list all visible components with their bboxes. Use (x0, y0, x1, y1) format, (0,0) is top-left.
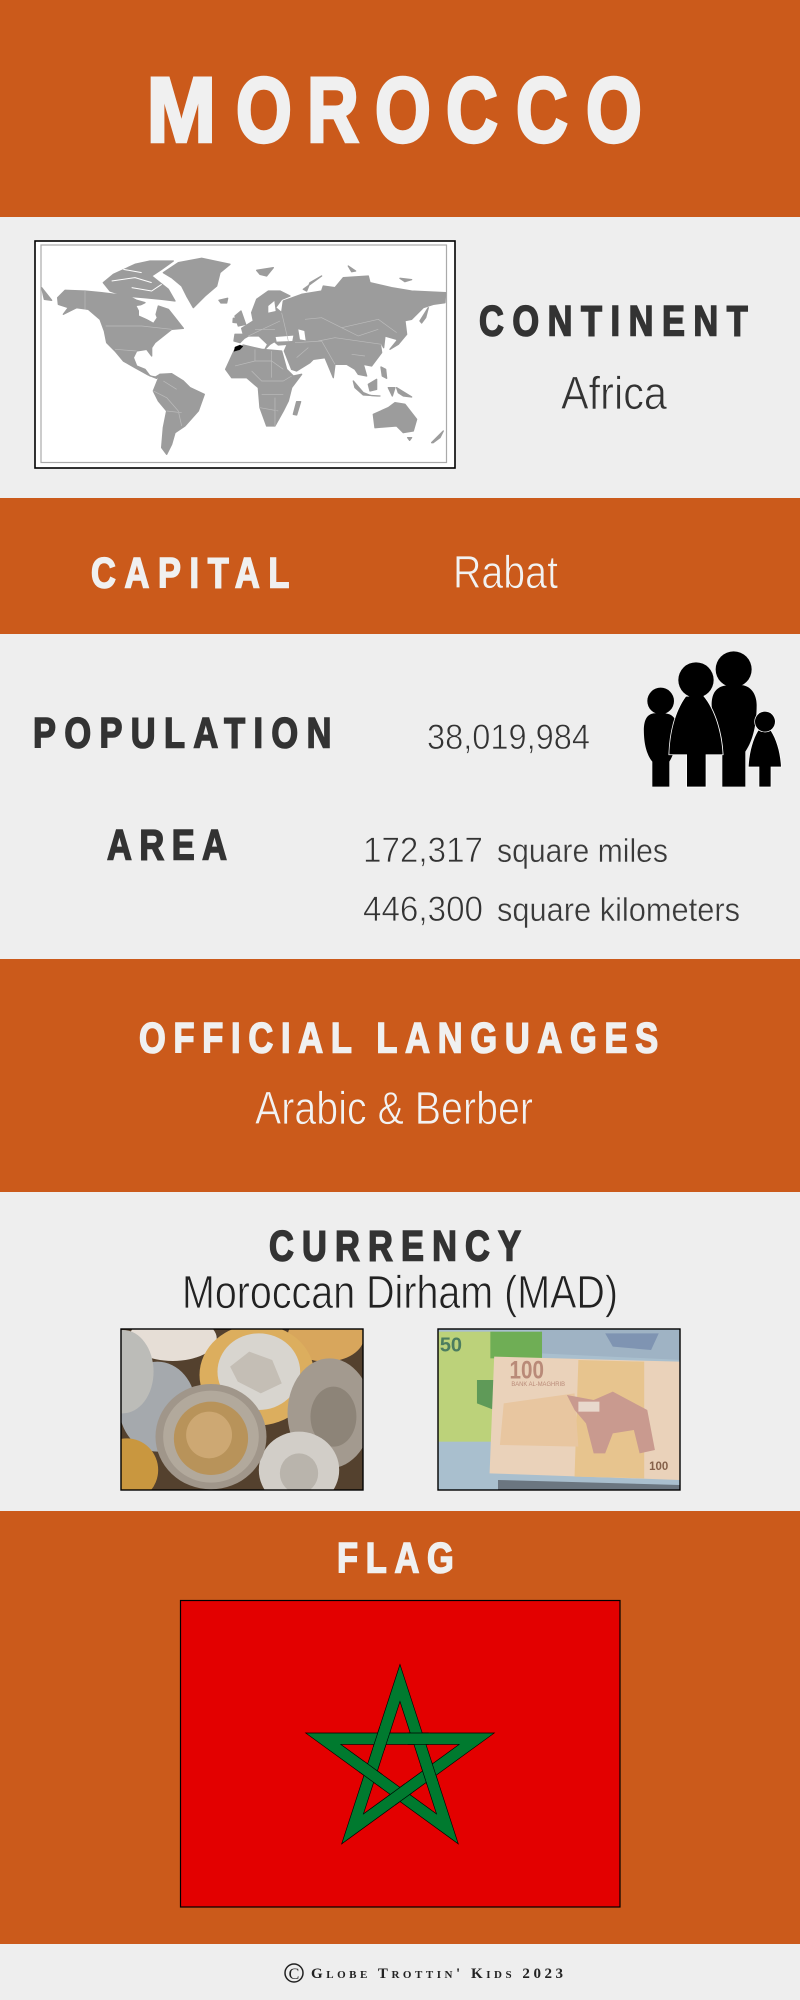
australia, tasmania and new zealand (373, 403, 443, 443)
baltic (268, 301, 276, 313)
pentagram star (323, 1683, 477, 1829)
title: OROCCO (236, 59, 642, 162)
flag heading: FLAG (337, 1535, 454, 1582)
eurasia (234, 276, 446, 378)
area value: square kilometers: 446,300 (363, 890, 483, 929)
banknotes picture: 50 (440, 1334, 462, 1356)
alaska tip (42, 288, 52, 300)
inland seas (276, 329, 306, 342)
borders (85, 291, 397, 426)
languages heading: OFFICIAL LANGUAGES (139, 1015, 658, 1062)
continent heading: CONTINENT (479, 298, 748, 345)
panel: continent (35, 241, 748, 468)
small north atlantic and arctic islands (219, 266, 412, 326)
currency heading: CURRENCY (269, 1223, 521, 1270)
capital heading: CAPITAL (91, 550, 289, 597)
world map (35, 241, 455, 468)
credit line: Globe Trottin' Kids 2023 (311, 1966, 563, 1982)
flag of morocco (180, 1600, 620, 1907)
panel: flag (0, 1511, 800, 1944)
icon: copyright (285, 1964, 303, 1983)
currency value: Moroccan Dirham (MAD) (182, 1266, 618, 1318)
panel: currency (120, 1230, 681, 1491)
banknotes picture (437, 1327, 682, 1493)
hudson bay (137, 304, 157, 323)
capital value: Rabat (453, 546, 558, 598)
panel: population and area (33, 651, 781, 929)
continent value: Africa (561, 367, 667, 419)
languages value: Arabic & Berber (255, 1082, 533, 1134)
south america (153, 374, 204, 454)
title: M (147, 59, 216, 162)
footer (285, 1964, 563, 1983)
area value: square miles: 172,317 (363, 831, 483, 870)
coins picture (120, 1328, 364, 1491)
area heading: AREA (107, 822, 227, 869)
morocco highlight (234, 345, 243, 351)
japan, sakhalin, philippines, indonesia (353, 308, 428, 397)
title band (0, 0, 800, 217)
population value: 38,019,984 (427, 718, 590, 757)
icon: family (644, 651, 781, 787)
panel: capital (0, 498, 800, 634)
arctic islands (103, 261, 175, 301)
banknotes picture: 100 (509, 1356, 544, 1384)
icon: copyright: C (289, 1966, 299, 1983)
area value: square miles (363, 831, 668, 870)
population heading: POPULATION (33, 710, 331, 757)
greenland (163, 258, 230, 308)
area value: square kilometers (363, 890, 740, 929)
banknotes picture: BANK AL-MAGHRIB (511, 1380, 565, 1388)
north america (58, 290, 183, 378)
africa (226, 345, 302, 426)
madagascar (293, 402, 301, 415)
area value: square kilometers: square kilometers (497, 891, 740, 928)
area value: square miles: square miles (497, 832, 668, 869)
banknotes picture: 100 (649, 1459, 668, 1473)
panel: official languages (0, 959, 800, 1192)
